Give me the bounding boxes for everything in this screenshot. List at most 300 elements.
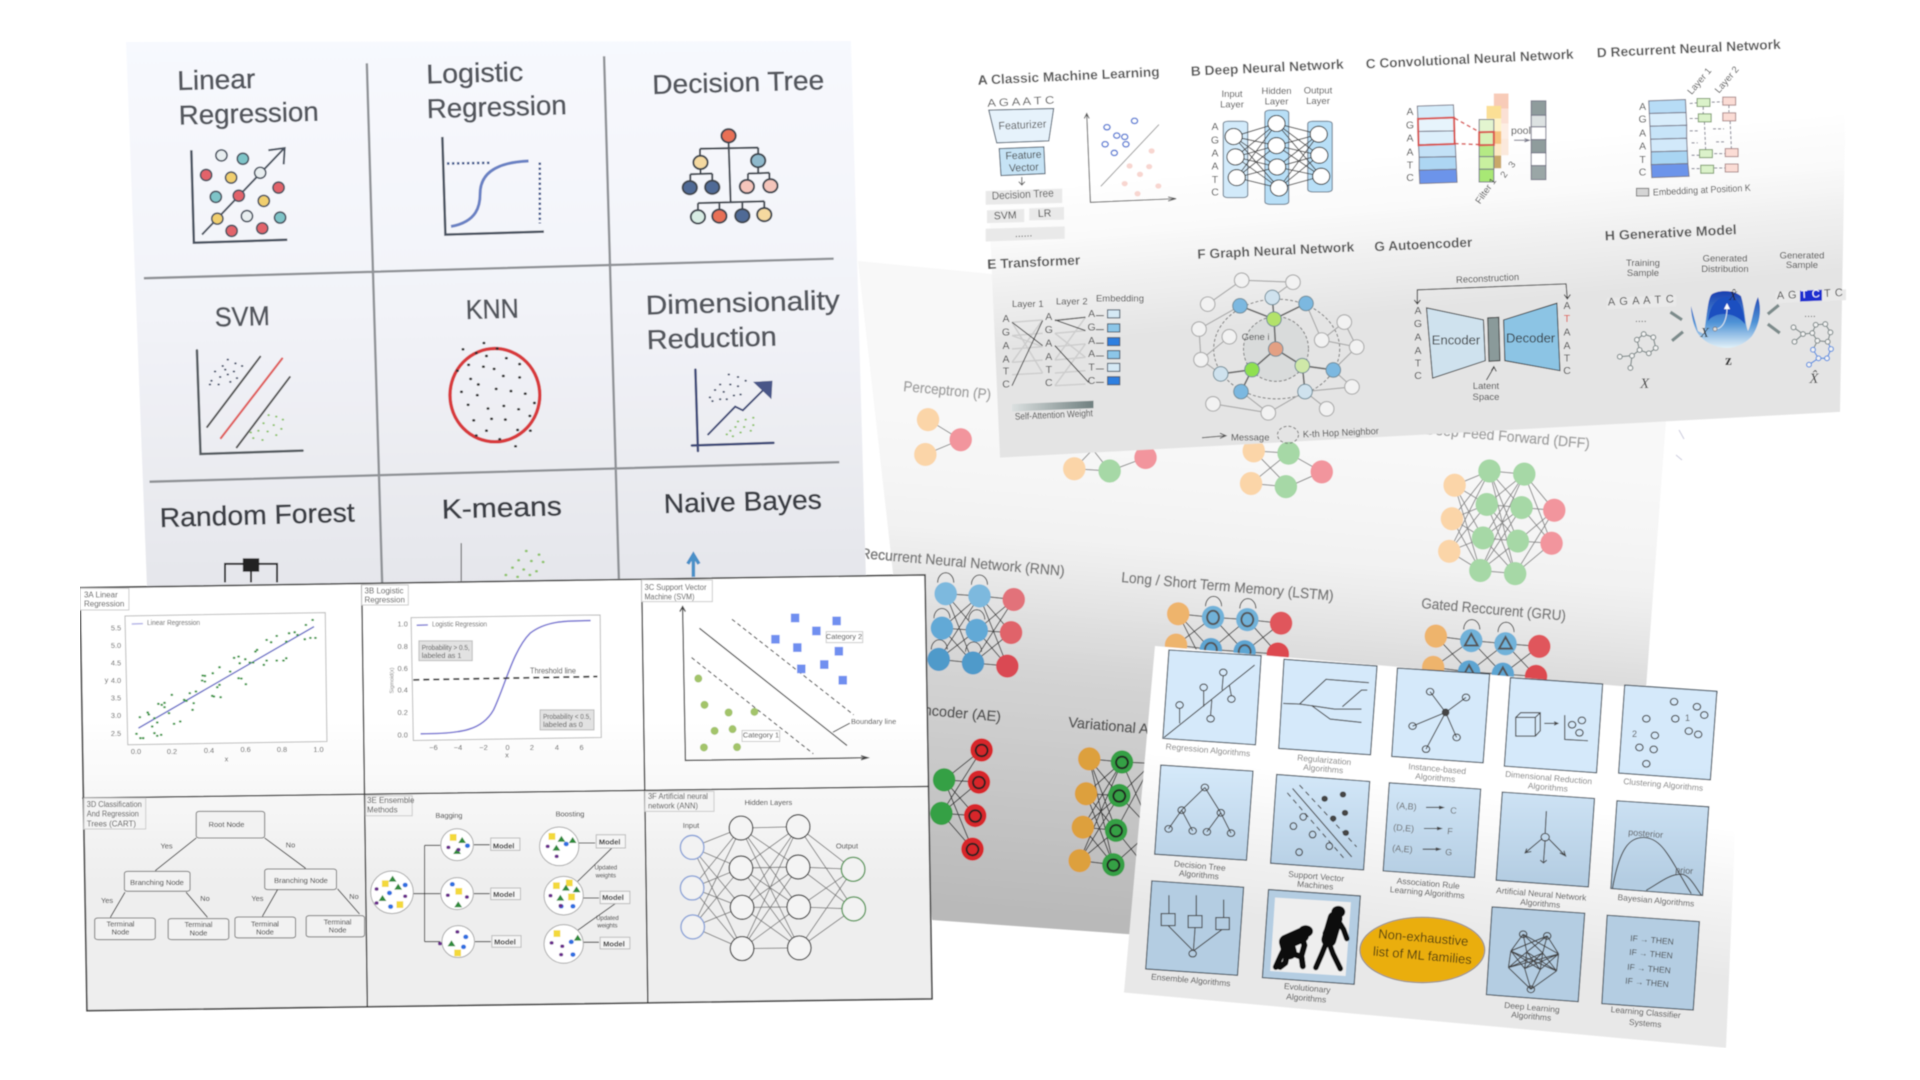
chart 3F: artificial neural network <box>680 815 865 961</box>
3A axis labels: 0.4 <box>204 746 214 755</box>
diagram labels E: T <box>1003 367 1010 378</box>
diagram C: convolutional network <box>1417 93 1546 184</box>
3A axis labels: 4.0 <box>111 676 121 685</box>
callout text: non-exhaustive: list of ML families <box>1372 944 1472 967</box>
diagram labels H: Sample <box>1786 260 1818 271</box>
3D node labels: Terminal <box>251 919 279 928</box>
title F: F Graph Neural Network <box>1197 239 1355 262</box>
3D node labels: Root Node <box>209 820 244 829</box>
3A axis labels: 1.0 <box>313 745 324 754</box>
3A axis labels: 5.5 <box>111 623 121 632</box>
architecture diagrams <box>986 93 1738 411</box>
glyph labels: clustering numbers: 2 <box>1632 729 1637 739</box>
icon: dimensionality reduction chart <box>692 370 773 451</box>
3B axis labels and annotations: 4 <box>555 743 559 752</box>
glyph: deep learning <box>1508 931 1559 993</box>
glyph: evolution silhouettes <box>1270 898 1351 976</box>
diagram labels E: A <box>1045 339 1052 350</box>
diagram labels D: A <box>1639 142 1646 153</box>
captions: top row: Instance-based <box>1408 761 1467 776</box>
diagram labels B <box>1211 85 1333 198</box>
diagram labels H: .... <box>1804 309 1816 320</box>
diagram H: generative model <box>1607 289 1846 370</box>
title E: E Transformer <box>987 252 1081 272</box>
chart 3B: logistic regression <box>411 615 601 740</box>
glyph labels: clustering numbers: 1 <box>1685 713 1690 723</box>
3F labels: Input <box>683 821 699 830</box>
diagram D: recurrent network <box>1636 97 1738 196</box>
label: 3A <box>84 590 124 609</box>
glyph: neural network <box>1525 811 1566 863</box>
diagram labels D: A <box>1639 129 1646 140</box>
diagram labels B: Layer <box>1220 100 1244 111</box>
captions: lower rows: Learning Algorithms <box>1389 884 1465 901</box>
glyph: bayesian curves <box>1612 838 1701 895</box>
chart 3C: support vector machine <box>680 607 868 760</box>
3B axis labels and annotations: 6 <box>580 743 584 752</box>
diagram labels E: Self-Attention Weight <box>1015 408 1093 423</box>
title G: G Autoencoder <box>1374 235 1473 254</box>
diagram labels A: Feature <box>1005 150 1042 162</box>
title B: B Deep Neural Network <box>1190 57 1344 79</box>
diagram labels A: Vector <box>1009 162 1039 175</box>
diagram labels C: A <box>1407 134 1414 145</box>
label: 3D <box>87 800 142 828</box>
diagram labels D: T <box>1639 155 1646 166</box>
diagram labels E: T <box>1088 363 1095 374</box>
label: 3C: 3C Support Vector <box>644 583 707 592</box>
panel: neural network zoo <box>858 261 1684 970</box>
3B axis labels and annotations: 0.2 <box>398 708 408 717</box>
heading: RNN: Recurrent Neural Network (RNN) <box>860 546 1065 580</box>
title C: C Convolutional Neural Network <box>1365 47 1574 71</box>
diagram labels B: Output <box>1304 85 1333 96</box>
3A axis labels <box>105 618 324 764</box>
diagram labels A: SVM <box>994 210 1017 222</box>
diagram labels H: z <box>1725 353 1732 369</box>
3B axis labels and annotations: Logistic Regression <box>432 620 487 629</box>
3B axis labels and annotations: −4 <box>454 743 462 752</box>
diagram labels H: X̂ <box>1728 288 1738 303</box>
diagram labels H: Generated <box>1780 250 1824 261</box>
captions: lower rows: Evolutionary <box>1284 981 1332 995</box>
glyph: association arrows <box>1423 806 1443 851</box>
diagram labels B: A <box>1212 149 1219 160</box>
3E labels: Bagging <box>435 811 463 820</box>
diagram labels B: Input <box>1221 89 1243 100</box>
heading: Auto Encoder: Auto Encoder (AE) <box>880 699 1002 726</box>
title H: H Generative Model <box>1604 222 1737 243</box>
diagram labels G: Reconstruction <box>1456 272 1519 286</box>
diagram labels H: X <box>1639 376 1650 392</box>
diagram labels G: A <box>1415 346 1422 357</box>
diagram labels B: Layer <box>1306 96 1330 107</box>
diagram labels D: A <box>1639 102 1646 113</box>
3B axis labels and annotations: 0.0 <box>398 731 408 739</box>
diagram labels E: C <box>1002 379 1010 390</box>
label: 3B: 3B Logistic <box>364 586 404 595</box>
captions: top row: Clustering Algorithms <box>1623 776 1704 793</box>
3B axis labels and annotations: labeled as 0 <box>543 720 583 729</box>
diagram labels G: A <box>1564 341 1571 352</box>
diagram labels B: A <box>1212 162 1219 173</box>
diagram labels A <box>987 95 1055 240</box>
diagram labels E: A <box>1088 336 1095 347</box>
chart 3A: linear regression scatter <box>125 613 327 745</box>
diagram labels G: T <box>1564 354 1571 365</box>
3A axis labels: 2.5 <box>111 729 121 738</box>
glyph: instance-based <box>1409 688 1470 752</box>
diagram labels B: C <box>1211 187 1219 198</box>
3D node labels: No <box>349 892 359 901</box>
diagram labels B: G <box>1211 136 1219 147</box>
diagram labels D: Layer 1 <box>1685 66 1714 97</box>
captions: top row: Algorithms <box>1303 762 1344 775</box>
diagram labels E: A <box>1088 349 1095 360</box>
diagram labels C: A <box>1407 107 1414 118</box>
captions: lower rows: Machines <box>1297 879 1334 892</box>
heading: Variational Autoencoder: Variational AE (VAE) <box>1068 715 1201 742</box>
icon: random forest node <box>243 558 259 572</box>
blue boxes <box>1146 650 1717 1010</box>
panel: ML algorithm charts 3A-3F <box>80 575 932 1011</box>
diagram labels B: Hidden <box>1261 86 1292 97</box>
glyph: support vector machine <box>1287 785 1357 860</box>
diagram labels E: G <box>1088 323 1096 334</box>
diagram labels G: Encoder <box>1432 333 1481 348</box>
label: 3F: 3F Artificial neural <box>648 792 708 801</box>
diagram B: deep neural network <box>1223 110 1332 204</box>
3C annotations <box>743 632 896 739</box>
callout text: non-exhaustive: Non-exhaustive <box>1378 926 1469 949</box>
3B axis labels and annotations: 2 <box>530 743 534 752</box>
heading: LSTM: Long / Short Term Memory (LSTM) <box>1121 570 1334 605</box>
diagram labels H <box>1608 250 1843 392</box>
3F labels <box>683 798 858 851</box>
diagram labels E: A <box>1045 352 1052 363</box>
diagram labels A: Featurizer <box>998 118 1047 133</box>
captions: lower rows: Ensemble Algorithms <box>1151 972 1231 988</box>
diagram labels E: A <box>1003 341 1010 352</box>
glyph: regression <box>1164 665 1255 737</box>
label: Regression: Regression <box>178 97 319 130</box>
diagram labels C: G <box>1406 121 1414 132</box>
captions: lower rows: Decision Tree <box>1174 859 1226 873</box>
3B axis labels and annotations: labeled as 1 <box>422 651 462 660</box>
icon: logistic curve <box>442 137 544 235</box>
label: 3B <box>364 586 405 605</box>
icon: SVM margins <box>197 350 303 454</box>
diagram labels F: K-th Hop Neighbor <box>1303 426 1379 441</box>
glyph labels: association rules: F <box>1447 826 1454 837</box>
title D: D Recurrent Neural Network <box>1596 37 1781 60</box>
icon: naive bayes partial <box>688 555 699 577</box>
label boxes <box>80 580 714 829</box>
diagram labels A: Decision Tree <box>992 188 1054 202</box>
panel: algorithm grid <box>126 41 866 587</box>
diagram labels D: G <box>1639 115 1647 126</box>
callout text: non-exhaustive <box>1372 926 1472 967</box>
3B axis labels and annotations: 0.4 <box>398 686 408 694</box>
diagram labels E <box>1002 294 1144 423</box>
label: 3E <box>367 796 415 815</box>
grid lines, label boxes and charts <box>80 580 928 1007</box>
3E labels: weights <box>596 924 618 930</box>
3D node labels: Terminal <box>107 919 135 928</box>
3B axis labels and annotations: Probability > 0.5, <box>422 643 470 652</box>
diagram labels E: Embedding <box>1096 294 1144 305</box>
diagram labels F: Message <box>1231 433 1269 444</box>
diagram labels E: A <box>1003 354 1010 365</box>
diagram labels G: C <box>1414 371 1422 382</box>
captions: lower rows: Algorithms <box>1179 868 1219 881</box>
oval callout shape <box>1360 917 1485 983</box>
3A axis labels: 0.6 <box>240 745 251 754</box>
diagram labels E: Layer 2 <box>1056 297 1088 308</box>
heading: Deep Feed Forward: Deep Feed Forward (DFF) <box>1425 422 1590 452</box>
label: Regression: Regression <box>426 90 567 124</box>
3E labels: Updated <box>594 865 617 871</box>
3D node labels: Yes <box>101 896 113 905</box>
3B axis labels and annotations: 0 <box>506 743 510 752</box>
3D node labels: Terminal <box>185 920 213 929</box>
diagram labels C: Filter 1 <box>1473 176 1499 206</box>
3D node labels: Node <box>329 926 346 935</box>
3E labels <box>435 809 625 948</box>
diagram labels B: Layer <box>1265 97 1288 108</box>
glyph labels: association rules: (A,B) <box>1396 800 1417 812</box>
diagram labels E: G <box>1002 328 1010 339</box>
algorithm boxes and glyphs <box>1146 650 1717 1010</box>
label: Reduction: Reduction <box>646 321 777 355</box>
3D node labels: Terminal <box>324 917 352 926</box>
3B axis labels and annotations: −2 <box>479 743 488 752</box>
glyph: decision tree <box>1165 784 1235 837</box>
label: Logistic: Logistic <box>426 57 524 89</box>
diagram labels B: A <box>1212 122 1219 133</box>
3A axis labels: 3.5 <box>111 693 121 702</box>
diagram labels G: T <box>1415 358 1422 369</box>
heading: Perceptron: Perceptron (P) <box>903 379 992 403</box>
3B axis labels and annotations: Sigmoid(x) <box>390 667 396 694</box>
3A axis labels: Linear Regression <box>147 618 200 627</box>
captions: top row: Regression Algorithms <box>1165 741 1251 759</box>
label: Dimensionality: Dimensionality <box>645 285 841 320</box>
3B axis labels and annotations: Threshold line <box>530 667 577 676</box>
captions: lower rows: Systems <box>1629 1017 1662 1029</box>
diagram labels E: A <box>1003 314 1010 325</box>
diagram labels G: A <box>1415 333 1422 344</box>
3A axis labels: 3.0 <box>111 711 121 720</box>
diagram labels G: A <box>1415 306 1422 317</box>
diagram labels C: pool <box>1511 126 1531 137</box>
3A axis labels: y <box>105 676 109 685</box>
diagram labels B: T <box>1212 175 1219 186</box>
diagram labels G <box>1414 272 1571 403</box>
captions: top row: Algorithms <box>1415 771 1456 784</box>
glyph labels: association rules: (A,E) <box>1392 843 1413 855</box>
captions: top row: Regularization <box>1297 752 1352 767</box>
diagram labels G: Latent <box>1473 381 1500 392</box>
glyph labels: association rules: (D,E) <box>1393 822 1415 834</box>
glyph labels: clustering numbers <box>1632 713 1690 739</box>
3B axis labels and annotations <box>390 619 591 760</box>
3D node labels: No <box>200 894 210 903</box>
icon: linear regression scatter <box>191 148 287 243</box>
label: 3E: Methods <box>367 806 398 815</box>
3E labels: Model <box>603 939 625 948</box>
3B axis labels and annotations: 1.0 <box>398 619 408 628</box>
captions: lower rows: Algorithms <box>1286 991 1327 1005</box>
captions: lower rows: Support Vector <box>1288 869 1345 884</box>
diagram labels C: 3 <box>1506 160 1518 170</box>
diagram labels G: T <box>1564 314 1571 325</box>
captions: top row: Dimensional Reduction <box>1505 769 1593 786</box>
diagram labels H: Sample <box>1627 268 1659 279</box>
diagram labels G: Space <box>1473 392 1499 403</box>
3E labels: Model <box>493 890 515 899</box>
diagram labels F: Gene i <box>1242 332 1270 343</box>
label: Linear: Linear <box>177 64 256 96</box>
glyph labels: bayesian <box>1628 827 1694 876</box>
diagram labels C: T <box>1407 161 1414 172</box>
3E labels: Model <box>599 838 621 847</box>
label: 3A: Regression <box>84 600 124 609</box>
3D node labels: No <box>286 841 295 850</box>
panel: deep learning architectures A-H <box>977 20 1847 458</box>
diagram labels E: Layer 1 <box>1012 299 1044 310</box>
diagram labels D <box>1639 64 1752 198</box>
3D node labels: Yes <box>160 842 173 851</box>
3D node labels: Yes <box>251 894 264 903</box>
icon: decision tree <box>683 129 778 224</box>
label: KNN: KNN <box>465 294 519 325</box>
glyph labels: learning classifier rules: IF → THEN <box>1625 976 1669 989</box>
label: 3E: 3E Ensemble <box>367 796 415 805</box>
glyph labels: learning classifier rules <box>1625 933 1674 989</box>
glyph: instance-based hub <box>1442 709 1449 716</box>
3C annotations: Boundary line <box>851 717 896 726</box>
diagram labels A: A G A A T C <box>987 95 1055 110</box>
glyph labels: association rules <box>1392 800 1458 857</box>
captions: lower rows: Bayesian Algorithms <box>1617 892 1695 909</box>
glyph: clustering <box>1636 698 1708 767</box>
label: SVM: SVM <box>214 301 270 332</box>
glyph: ensemble <box>1161 895 1229 957</box>
captions: top row <box>1165 741 1704 794</box>
label: 3D: 3D Classification <box>87 800 142 809</box>
label: 3F <box>648 792 708 811</box>
label: K-means: K-means <box>441 491 562 524</box>
captions: lower rows: Algorithms <box>1520 897 1561 910</box>
grid lines and icons <box>144 56 839 582</box>
label: 3B: Regression <box>364 596 405 605</box>
diagram labels E: T <box>1046 365 1053 376</box>
diagram labels H: Generated <box>1703 253 1747 264</box>
label: 3D: Trees (CART) <box>87 819 136 828</box>
captions: lower rows: Association Rule <box>1396 876 1460 891</box>
diagram labels H: .... <box>1635 314 1647 325</box>
glyph labels: bayesian: prior <box>1675 865 1694 876</box>
chart 3E: ensemble methods <box>371 827 630 963</box>
icon: random forest partial <box>225 564 277 582</box>
glyph labels: bayesian: posterior <box>1628 827 1664 840</box>
3E labels: Updated <box>596 916 619 922</box>
label: 3F: network (ANN) <box>648 802 698 811</box>
label: 3C <box>644 583 707 601</box>
3B axis labels and annotations: −6 <box>429 743 438 752</box>
3B axis labels and annotations: Probability < 0.5, <box>543 712 591 721</box>
diagram labels A: ...... <box>1015 228 1033 240</box>
diagram labels D: Layer 2 <box>1713 64 1742 96</box>
3B axis labels and annotations: 0.6 <box>398 664 408 673</box>
title A: A Classic Machine Learning <box>977 64 1160 88</box>
label: Decision Tree: Decision Tree <box>652 65 825 100</box>
glyph labels: learning classifier rules: IF → THEN <box>1630 933 1674 947</box>
glyph labels: association rules: G <box>1445 847 1453 857</box>
3D node labels: Node <box>256 928 274 937</box>
3E labels: weights <box>595 873 616 879</box>
diagram labels C: 2 <box>1498 170 1510 180</box>
3B axis labels and annotations: x <box>505 751 509 760</box>
3D node labels <box>101 820 359 938</box>
chart 3D: CART decision tree <box>95 811 365 940</box>
diagram G: autoencoder <box>1414 284 1570 380</box>
diagram labels C <box>1406 107 1531 206</box>
label: 3C: Machine (SVM) <box>644 592 695 601</box>
3D node labels: Branching Node <box>274 876 328 885</box>
3F labels: Hidden Layers <box>745 798 793 807</box>
captions: lower rows: Deep Learning <box>1504 1000 1560 1015</box>
label: 3D: And Regression <box>87 810 139 819</box>
diagram F: graph neural network <box>1192 273 1364 443</box>
diagram labels H: X̂ <box>1808 371 1819 387</box>
diagram labels G: A <box>1564 328 1571 339</box>
3A axis labels: x <box>225 755 229 764</box>
diagram labels D: C <box>1639 167 1647 178</box>
icon: k-means partial <box>461 544 543 581</box>
3A axis labels: 4.5 <box>111 659 121 668</box>
diagram E: transformer <box>1012 310 1120 411</box>
diagram labels G: Decoder <box>1506 330 1556 345</box>
diagram A: classic ML <box>986 109 1176 241</box>
3A axis labels: 0.8 <box>277 745 287 754</box>
3E labels: Boosting <box>556 809 584 818</box>
label: Naive Bayes: Naive Bayes <box>663 485 822 519</box>
captions: lower rows <box>1151 859 1695 1029</box>
diagram labels E: A <box>1088 309 1095 320</box>
diagram labels H: A G T C T C <box>1777 287 1843 302</box>
glyph labels: learning classifier rules: IF → THEN <box>1629 947 1673 961</box>
diagram labels H: A G A A T C <box>1608 293 1674 309</box>
diagram labels H: Training <box>1626 258 1660 269</box>
diagram labels H: X <box>1699 326 1709 341</box>
diagram labels G: A <box>1564 301 1571 312</box>
diagram labels E: C <box>1088 376 1096 387</box>
3E labels: Model <box>494 937 516 946</box>
diagram labels G: C <box>1563 366 1571 377</box>
3A axis labels: 0.2 <box>167 747 177 756</box>
3A axis labels: 0.0 <box>131 747 141 756</box>
captions: lower rows: Algorithms <box>1511 1010 1552 1023</box>
label: Random Forest: Random Forest <box>159 498 356 533</box>
3B axis labels and annotations: 0.8 <box>398 642 408 651</box>
3E labels: Model <box>602 893 624 902</box>
diagram labels F <box>1231 332 1379 444</box>
captions: top row: Algorithms <box>1527 780 1568 794</box>
3D node labels: Node <box>190 929 207 938</box>
3A axis labels: 5.0 <box>111 641 121 650</box>
